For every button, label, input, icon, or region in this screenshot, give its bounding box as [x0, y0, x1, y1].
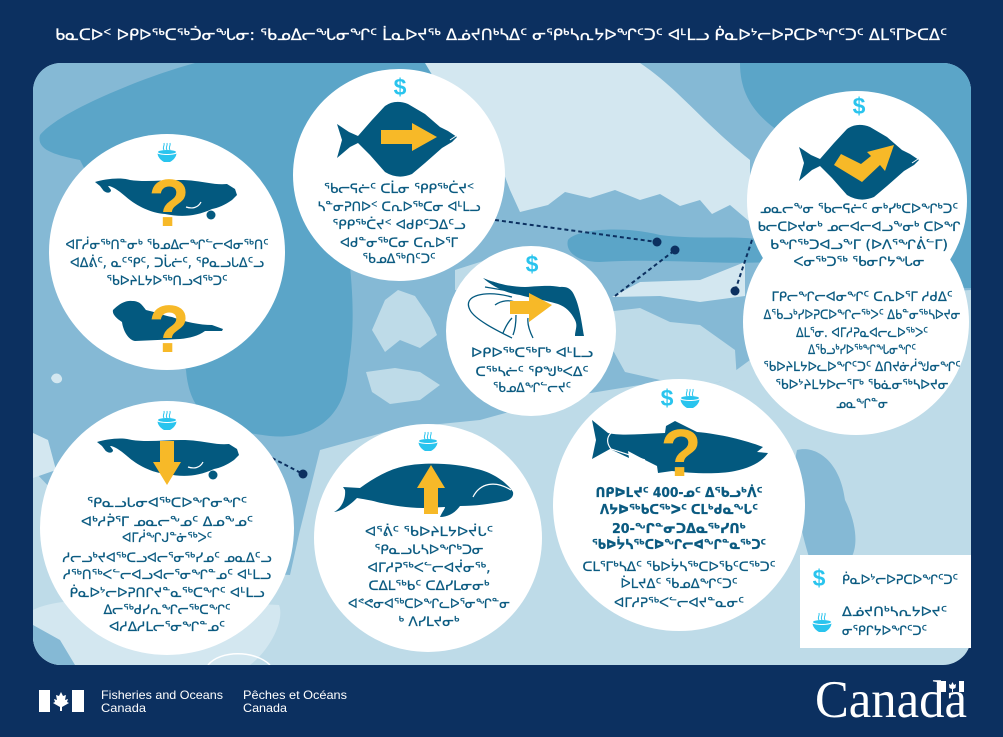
panel: halibut north: ᑲᓕᑕᐅᔪᓂᒃ ᓄᓕᐊᓕᐊᓗᖕᓂᒃ ᑕᐅᖏ	[758, 220, 960, 235]
map background	[33, 63, 971, 665]
text: lower right notes: ᒥᑭᓕᖏᓕᐊᓂᖏᑦ ᑕᕆᐅᕐᒥ ᓱᑯᐃᑦ	[772, 290, 952, 305]
panel: beluga decline: ᓱᓕᓗᒃᔪᐊᖅᑕᓗᐊᓕᕐᓂᖅᓯᓄᑦ ᓄᓇᐃᑦᓗ	[62, 551, 272, 566]
panel: halibut central: ᓴᓐᓂᕈᑎᐅᑉ ᑕᕆᐅᖅᑕᓂ ᐊᒻᒪᓗ	[318, 200, 480, 215]
panel: beluga decline: ᑮᓇᐅᔾᓕᐅᕈᑎᒋᔪᓐᓇᖅᑕᖏᑦ ᐊᒻᒪᓗ	[70, 584, 264, 601]
footer: Canada wordmark: Canada	[815, 671, 967, 729]
panel: halibut central: ᖃᓕᕋᓖᑦ ᑕᒫᓂ ᕿᑭᖅᑖᔪᑉ	[324, 180, 474, 197]
text: lower right notes	[764, 290, 960, 412]
panel: bowhead whale: ᐊᒥᓱᕈᖅᐸᓪᓕᐊᔫᓂᖅ,	[368, 559, 490, 576]
panel: beluga decline	[40, 401, 294, 655]
panel: shrimp: ᑕᖅᓴᓖᑦ ᕿᖑᒃᐸᐃᑦ	[476, 365, 588, 380]
footer: government of Canada signature: Pêches et Océans	[243, 688, 347, 702]
panel: shrimp: ᐅᑭᐅᖅᑕᖅᒥᒃ ᐊᒻᒪᓗ	[471, 346, 593, 361]
panel: bowhead whale: ᑕᐃᒪᖅᑲᑦ ᑕᐃᓯᒪᓂᓂᒃ	[368, 579, 490, 594]
panel: salmon: ᐆᒪᔪᐃᑦ ᖃᓄᐃᖏᑦᑐᑦ	[620, 575, 738, 592]
panel: bowhead whale: ᐊᕝᕙᓂᐊᖅᑕᐅᖏᓚᐅᕐᓂᖏᓐᓂ	[348, 597, 510, 612]
panel: halibut north	[747, 91, 967, 266]
panel: salmon	[553, 379, 805, 631]
panel: halibut central: ᖃᓄᐃᖅᑎᑦᑐᑦ	[362, 252, 436, 267]
text: lower right notes: ᐃᖃᓗᒃᓯᐅᖅᖏᖓᓂᖏᑦ	[808, 343, 916, 358]
text: lower right notes: ᖃᐅᔾᔨᒪᔭᐅᓕᕐᒥᒃ ᖃᓈᓂᖅᓴᐅᔪᓂ	[776, 378, 948, 393]
panel: halibut central: ᐊᑯᓐᓂᖅᑕᓂ ᑕᕆᐅᕐᒥ	[340, 236, 459, 251]
panel: seal and beluga: ᐊᒥᓲᓂᖅᑎᓐᓂᒃ ᖃᓄᐃᓕᖏᓪᓕᐊᓂᖅᑎᑦ	[66, 236, 268, 253]
text: lower right notes: ᖃᐅᔨᒪᔭᐅᓚᐅᖏᑦᑐᑦ ᐃᑎᔪᓃᓲᖑᓂᖏᑦ	[764, 358, 960, 375]
panel: shrimp	[446, 246, 616, 416]
panel: beluga decline: ᐊᒃᓱᕉᕐᒥ ᓄᓇᓕᖕᓄᑦ ᐃᓄᖕᓄᑦ	[81, 513, 253, 530]
panel: salmon: ᑎᑭᐅᒪᔪᑦ 400-ᓄᑦ ᐃᖃᓗᒃᐲᑦ	[596, 485, 762, 501]
legend: ᐃᓅᔪᑎᒃᓴᕆᔭᐅᔪᑦ	[842, 605, 947, 620]
legend: ᓂᕿᒋᔭᐅᖏᑦᑐᑦ	[842, 624, 927, 639]
panel: halibut north: ᓄᓇᓕᖕᓂ ᖃᓕᕋᓖᑦ ᓂᒃᓯᒃᑕᐅᖏᒃᑐᑦ	[760, 202, 958, 217]
panel: halibut north: $	[853, 93, 866, 119]
panel: salmon: 20-ᖏᓐᓂᑐᐃᓇᖅᓯᑎᒃ	[612, 522, 746, 537]
footer: government of Canada signature: Canada	[101, 701, 146, 715]
panel: bowhead whale: ᒃ ᐱᓯᒪᔪᓂᒃ	[398, 615, 460, 630]
panel: bowhead whale: ᐊᕐᕖᑦ ᖃᐅᔨᒪᔭᐅᔫᒐᑦ	[365, 523, 493, 540]
panel: salmon: ?	[661, 416, 701, 491]
panel: bowhead whale: ᕿᓇᓗᒐᓴᐅᖏᒃᑐᓂ	[374, 543, 484, 558]
panel: lower right circle	[743, 258, 969, 435]
panel: seal and beluga: ?	[149, 166, 189, 241]
footer: government of Canada signature: Canada	[243, 701, 287, 715]
title: ᑲᓇᑕᐅᑉ ᐅᑭᐅᖅᑕᖅᑑᓂᖓᓂ: ᖃᓄᐃᓕᖓᓂᖏᑦ ᒫᓇᐅᔪᖅ ᐃᓅᔪᑎᒃᓴᐃᑦ ᓂᕿᒃᓴᕆᔭᐅᖏᑦᑐᑦ ᐊᒻᒪᓗ ᑮᓇᐅᔾᓕᐅᕈᑕᐅᖏᑦᑐᑦ ᐃᒪᕐᒥᐅᑕᐃᑦ	[55, 26, 947, 44]
panel: halibut north: ᑲᖏᖅᑐᐊᓗᖕᒥ (ᐅᐱᕐᖏᕖᓪᒥ)	[770, 236, 948, 253]
panel: seal and beluga: ?	[149, 292, 189, 367]
panel: halibut north: ᐸᓂᖅᑐᖅ ᖃᓂᒋᔭᖓᓂ	[794, 255, 924, 270]
text: lower right notes: ᓄᓇᖏᓐᓂ	[836, 397, 888, 412]
panel: salmon: ᖃᐅᔮᓴᖅᑕᐅᖏᓕᐊᖏᓐᓇᖅᑐᑦ	[592, 537, 766, 553]
legend: $	[813, 565, 826, 591]
panel: beluga decline: ᓱᕐᒃᑎᖅᐸᓪᓕᐊᓗᐊᓕᕐᓂᖏᓐᓄᑦ ᐊᒻᒪᓗ	[63, 568, 271, 583]
panel: seal and beluga: ᐊᐃᕖᑦ, ᓇᑦᕿᑦ, ᑐᒑᓖᑦ, ᕿᓇᓗᒐᐃᑦᓗ	[70, 254, 264, 271]
dotted connector lines	[272, 220, 752, 478]
panel: salmon: ᐱᔭᐅᖅᑲᑕᖅᐳᑦ ᑕᒪᒃᑯᓇᖓᑦ	[600, 503, 758, 518]
panel: shrimp: $	[526, 251, 539, 277]
panel: salmon: $	[661, 385, 674, 411]
text: lower right notes: ᐃᖃᓗᒃᓯᐅᕈᑕᐅᖏᓕᖅᐳᑦ ᐃᑲᓐᓂᖅᓴᐅᔪᓂ	[764, 308, 960, 323]
legend: ᑮᓇᐅᔾᓕᐅᕈᑕᐅᖏᑦᑐᑦ	[842, 571, 958, 588]
panel: halibut central	[293, 69, 505, 281]
panel: beluga decline: ᐃᓕᖅᑯᓯᕆᖏᓕᖅᑕᖏᑦ	[104, 603, 230, 618]
footer: government of Canada signature: Fisheries and Oceans	[101, 688, 223, 702]
panel: salmon: ᑕᒪᕐᒥᒃᓴᐃᑦ ᖃᐅᔮᓴᖅᑕᐅᖃᑦᑕᖅᑐᑦ	[582, 558, 776, 575]
panel: beluga decline: ᕿᓇᓗᒐᓂᐊᖅᑕᐅᖏᓂᖏᑦ	[87, 496, 247, 511]
legend	[800, 555, 971, 648]
text: lower right notes: ᐃᒪᕐᓂ. ᐊᒥᓱᕈᓇᐊᓕᓚᐅᖅᐳᑦ	[796, 326, 928, 341]
panel: beluga decline: ᐊᓱᐃᓱᒪᓕᕐᓂᖏᓐᓄᑦ	[109, 620, 225, 635]
panel: halibut central: ᕿᑭᖅᑖᔪᑉ ᐊᑯᑭᑦᑐᐃᑦᓗ	[332, 216, 466, 233]
panel: shrimp: ᖃᓄᐃᖏᓪᓕᔪᑦ	[493, 381, 571, 396]
panel: seal and beluga: ᖃᐅᔨᒪᔭᐅᖅᑎᓗᐊᖅᑐᑦ	[106, 274, 228, 289]
panel: bowhead whale	[314, 424, 542, 652]
panel: beluga decline: ᐊᒥᓲᖏᒍᓐᓃᖅᐳᑦ	[122, 529, 212, 546]
panel: salmon: ᐊᒥᓱᕈᖅᐸᓪᓕᐊᔪᓐᓇᓂᑦ	[614, 596, 744, 611]
panel: seal and beluga	[49, 134, 285, 370]
footer: government of Canada signature	[39, 688, 347, 715]
panel: halibut central: $	[394, 74, 407, 100]
